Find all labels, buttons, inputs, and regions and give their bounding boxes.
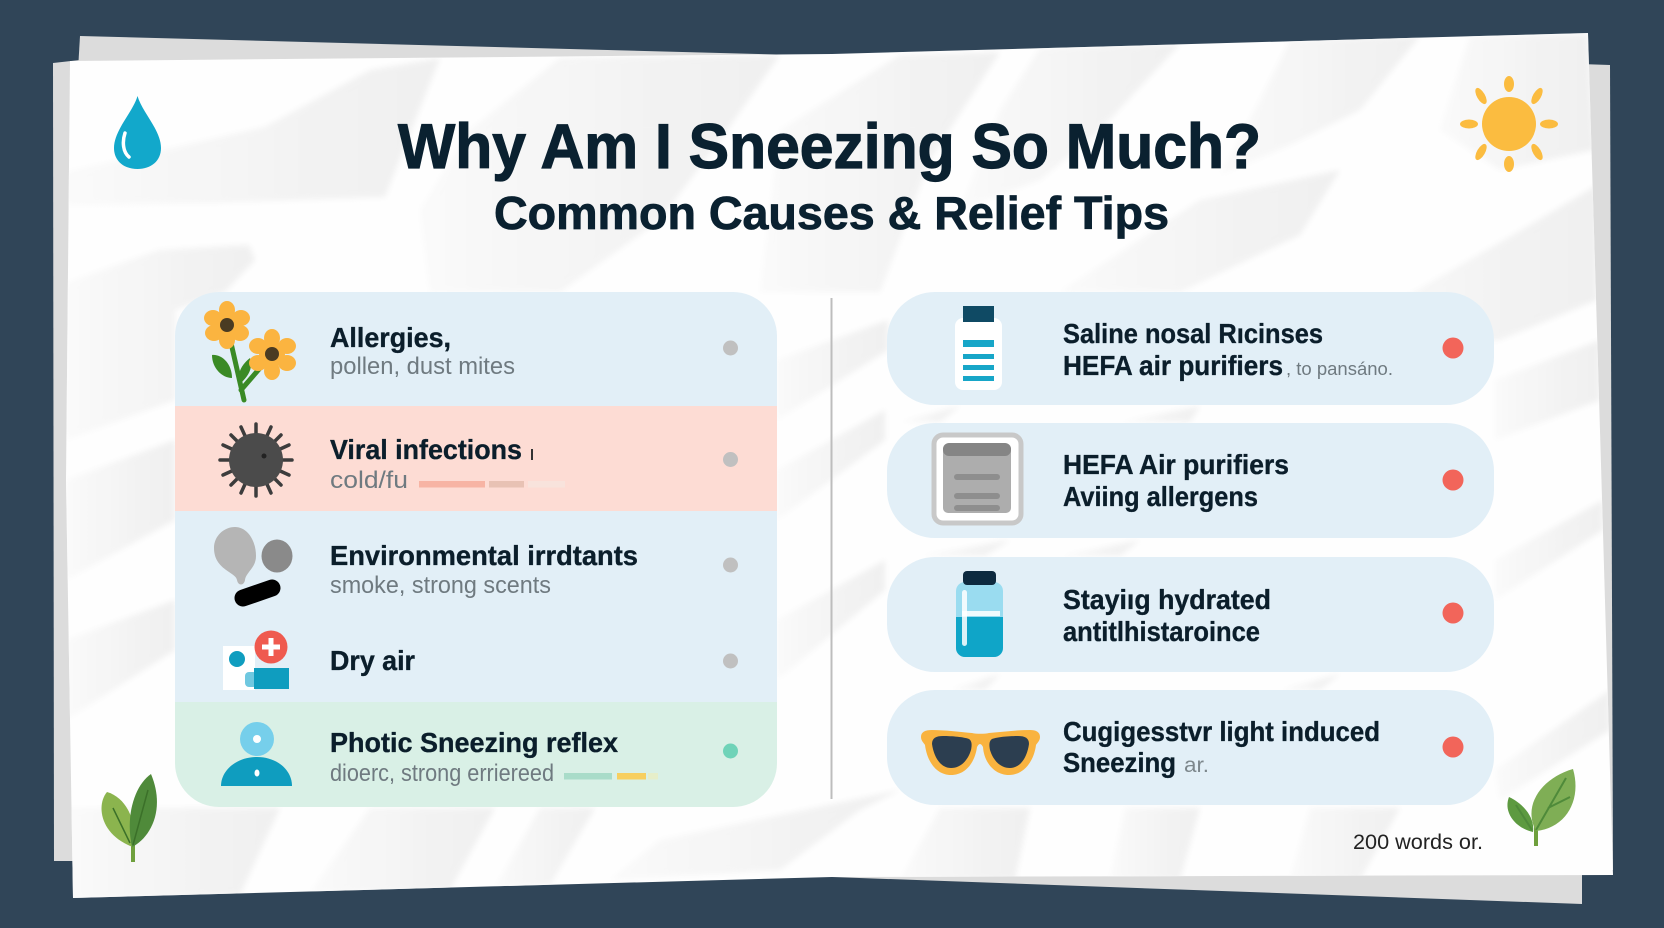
status dot (723, 340, 738, 356)
label: environmental irritants: Environmental irrdtants (330, 540, 638, 571)
label: viral infections: Viral infections (330, 434, 522, 465)
text: saline line 1: Saline nosal Rıcinses (1063, 318, 1323, 349)
text: hepa line 2: Aviing allergens (1063, 481, 1258, 512)
row: environmental irritants (214, 527, 738, 599)
icon: person (221, 722, 292, 786)
text: hydrated line 2: antitlhistaroince (1063, 616, 1260, 647)
row: viral infections (220, 424, 738, 496)
text: small note: ar. (1184, 754, 1209, 777)
icon: air purifier (934, 435, 1021, 523)
icon: sun (1460, 76, 1558, 172)
row: dry air (223, 630, 738, 690)
text: light line 1: Cugigesstvr light induced (1063, 716, 1380, 747)
sublabel: smoke: smoke, strong scents (330, 572, 551, 599)
row: allergies (204, 301, 738, 400)
icon: humidifier and cross (223, 630, 289, 690)
sublabel: cold/flu: cold/fu (330, 467, 408, 494)
icon: smoke (214, 527, 292, 598)
icon: saline bottle (955, 306, 1002, 390)
footer note: 200 words or. (1353, 831, 1483, 854)
subtitle: Common Causes & Relief Tips (494, 187, 1169, 239)
text: saline line 2: HEFA air purifiers (1063, 350, 1283, 381)
sublabel: photic: dioerc, strong erriereed (330, 760, 554, 787)
text: saline small note: , to pansáno. (1286, 359, 1393, 379)
label: dry air: Dry air (330, 645, 415, 676)
pill: staying hydrated (887, 557, 1494, 672)
red dot (1442, 338, 1464, 358)
pill: light induced sneezing (887, 690, 1494, 805)
icon: left leaf (102, 774, 157, 862)
decorative bars (564, 773, 658, 780)
text: hydrated line 1: Stayiıg hydrated (1063, 584, 1271, 615)
status dot (723, 744, 738, 758)
red dot (1442, 736, 1464, 758)
center divider (830, 298, 832, 799)
label: allergies: Allergies, (330, 322, 451, 353)
icon: flowers (204, 301, 296, 400)
red dot (1442, 602, 1464, 624)
status dot (723, 452, 738, 467)
icon: sunglasses (921, 730, 1040, 775)
title: Why Am I Sneezing So Much? (398, 112, 1261, 182)
icon: water bottle (956, 571, 1003, 657)
pill: hepa purifiers (887, 423, 1494, 538)
status dot (723, 558, 738, 572)
label: photic sneezing reflex: Photic Sneezing reflex (330, 727, 618, 758)
status dot (723, 654, 738, 668)
red dot (1442, 470, 1464, 490)
panel: relief tips (887, 292, 1494, 805)
icon: water drop (114, 96, 161, 169)
row: photic sneezing reflex (221, 722, 738, 787)
decorative bars (419, 481, 565, 488)
icon: right leaf (1507, 769, 1575, 846)
pill: saline rinses (887, 292, 1494, 405)
small tick mark (531, 449, 533, 460)
text: hepa line 1: HEFA Air purifiers (1063, 449, 1289, 480)
icon: virus (220, 424, 292, 496)
sublabel: allergies: pollen, dust mites (330, 353, 515, 380)
text: light line 2: Sneezing (1063, 747, 1176, 778)
panel: causes (175, 292, 777, 807)
